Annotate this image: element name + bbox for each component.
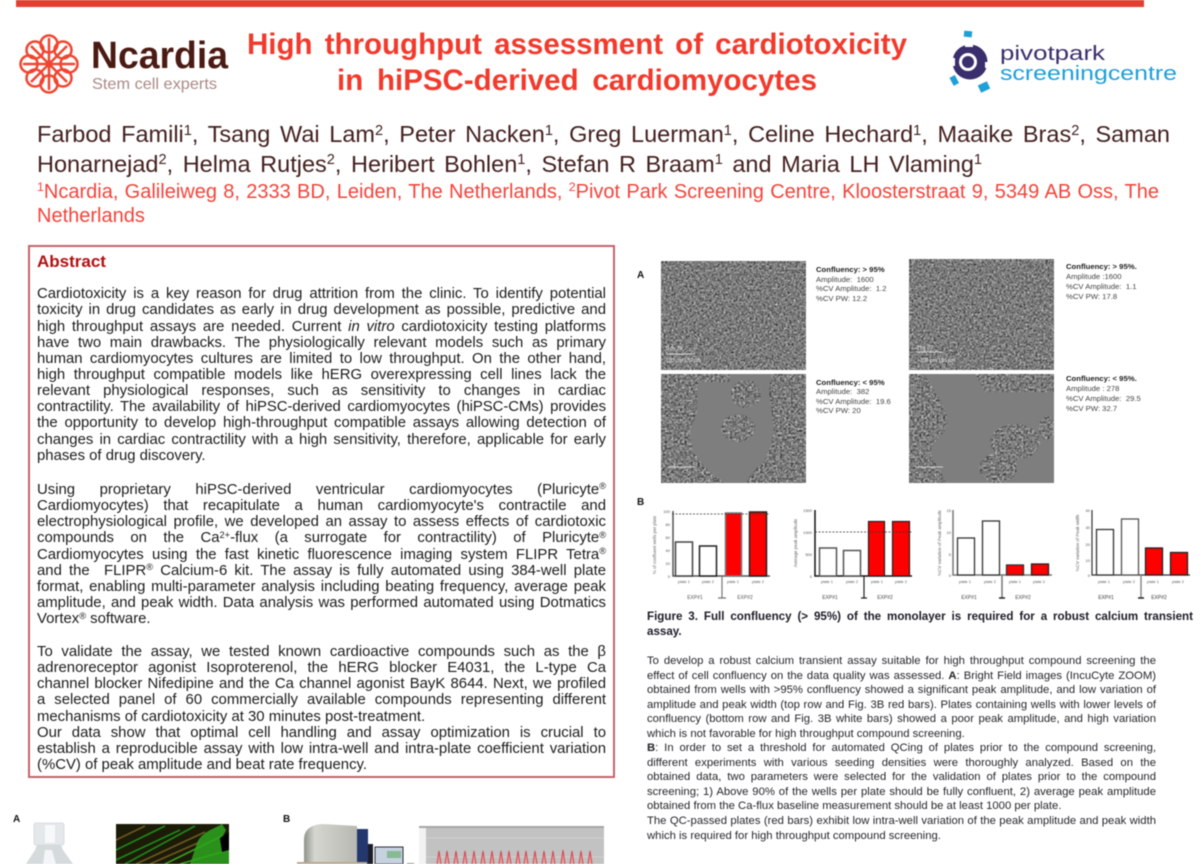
panel: abstract	[28, 245, 615, 778]
bar chart 1: confluent wells percentage: plate 1	[678, 579, 691, 584]
logo: Pivot Park Screening Centre	[949, 31, 1177, 93]
panel label B, figure 3: B	[637, 497, 644, 508]
bar chart 4: variation of peak width: plate 1	[1147, 579, 1160, 584]
figure 3 description text: obtained data, two parameters were selected for the validation of plates prior to the compound	[647, 771, 1156, 783]
stats: bottom left image: %CV Amplitude: 19.6	[816, 397, 891, 406]
abstract paragraph 3: Our data show that optimal cell handling and assay optimization is crucial to	[37, 725, 606, 741]
bar chart 2: average peak amplitude: plate 2	[895, 579, 908, 584]
bar chart 2: average peak amplitude: EXP#2	[877, 595, 893, 601]
stats: top left image: Amplitude: 1600	[816, 275, 874, 284]
panel label A, figure 3: A	[637, 270, 644, 281]
abstract paragraph 2: Vortex® software.	[37, 611, 151, 627]
bar chart 1: confluent wells percentage: 40	[666, 548, 671, 553]
abstract paragraph 3: establish a reproducible assay with low intra-well and intra-plate coefficient variation	[37, 741, 606, 757]
figure 3 description text: screening; 1) Above 90% of the wells per plate should be fully confluent, 2) average peak amplitude	[647, 786, 1156, 798]
microscopy image: top right, confluent	[909, 259, 1054, 370]
figure 3 caption	[646, 610, 1194, 638]
bar chart 3: variation of peak amplitude: plate 2	[984, 579, 997, 584]
bar chart 1: confluent wells percentage: plate 2	[702, 579, 715, 584]
stats: top left image: %CV PW: 12.2	[816, 294, 867, 303]
abstract paragraph 1: high throughput assays are needed. Current in vitro cardiotoxicity testing platforms	[37, 318, 606, 334]
stats: bottom left image	[816, 378, 891, 415]
abstract paragraph 3	[36, 644, 607, 773]
bar chart 1: confluent wells percentage: 60	[666, 535, 671, 540]
figure 3 description text: B: In order to set a threshold for automated QCing of plates prior to the compound screening,	[647, 742, 1156, 754]
stats: top right image	[1066, 262, 1137, 301]
top banner bar	[16, 0, 1144, 7]
bar chart 1: confluent wells percentage	[652, 509, 770, 601]
abstract paragraph 1: high throughput compatible models like hERG overexpressing cell lines lack the	[37, 367, 606, 383]
logo: Ncardia: Stem cell experts	[92, 76, 217, 93]
abstract paragraph 2	[36, 481, 607, 627]
microscopy image: top right, confluent: 100 µm 100 µm	[920, 358, 955, 364]
bar chart 1: confluent wells percentage: plate 2	[752, 579, 765, 584]
bar chart 4: variation of peak width: %CV variation of Peak width	[1075, 514, 1080, 571]
bar chart 3: variation of peak amplitude: 15	[947, 508, 952, 513]
authors	[37, 121, 1170, 178]
panel label A, bottom figure: A	[13, 814, 20, 825]
stats: bottom left image: Confluency: < 95%	[816, 378, 885, 387]
bar chart 2: average peak amplitude: plate 1	[871, 579, 884, 584]
abstract paragraph 1: toxicity in drug candidates as early in drug development as possible, predictive and	[37, 302, 606, 318]
title	[247, 28, 908, 97]
abstract paragraph 3: channel blocker Nifedipine and the Ca channel agonist BayK 8644. Next, we profiled	[37, 676, 606, 692]
bar chart 4: variation of peak width: EXP#2	[1151, 595, 1167, 601]
abstract paragraph 1	[36, 286, 607, 464]
abstract paragraph 1: have two main drawbacks. The physiologically relevant models such as primary	[37, 335, 606, 351]
bar chart 2: average peak amplitude: 0	[810, 574, 813, 579]
figure 3 description text: obtained from wells with >95% confluency showed a significant peak amplitude, and low variation of	[647, 684, 1156, 696]
abstract paragraph 2: Using proprietary hiPSC-derived ventricular cardiomyocytes (Pluricyte®	[37, 481, 606, 498]
abstract heading: Abstract	[37, 252, 106, 271]
bar chart 4: variation of peak width: 20	[1086, 542, 1091, 547]
bar chart 3: variation of peak amplitude: EXP#1	[961, 595, 977, 601]
bar chart 4: variation of peak width: 0	[1088, 573, 1091, 578]
abstract paragraph 2: electrophysiological profile, we developed an assay to assess effects of cardiotoxic	[37, 514, 606, 530]
stats: top right image: %CV Amplitude: 1.1	[1066, 282, 1137, 291]
abstract paragraph 2: and the FLIPR® Calcium-6 kit. The assay is fully automated using 384-well plate	[37, 562, 606, 579]
bar chart 1: confluent wells percentage: 20	[666, 561, 671, 566]
abstract paragraph 1: relevant physiological responses, such as sensitivity to changes in cardiac	[37, 383, 606, 399]
bar chart 2: average peak amplitude: 500	[805, 552, 813, 557]
panel label B, bottom figure: B	[283, 814, 290, 825]
bar chart 3: variation of peak amplitude: plate 1	[959, 579, 972, 584]
bar chart 4: variation of peak width: plate 2	[1123, 579, 1136, 584]
abstract paragraph 2: format, enabling multi-parameter analysis including beating frequency, average peak	[37, 579, 606, 595]
bar chart 2: average peak amplitude: 1000	[803, 530, 813, 535]
abstract paragraph 1: human cardiomyocytes cultures are limited to low throughput. On the other hand,	[37, 351, 606, 367]
stats: top right image: Amplitude :1600	[1066, 272, 1122, 281]
abstract paragraph 2: Cardiomyocytes) that recapitulate a human cardiomyocyte's contractile and	[37, 498, 606, 514]
title: in hiPSC-derived cardiomyocytes	[337, 64, 817, 96]
abstract paragraph 1: changes in cardiac contractility with a high sensitivity, therefore, applicable for early	[37, 432, 606, 448]
authors: Honarnejad2, Helma Rutjes2, Heribert Bohlen1, Stefan R Braam1 and Maria LH Vlaming1	[37, 150, 982, 176]
bar chart 4: variation of peak width: 30	[1086, 525, 1091, 530]
bar chart 3: variation of peak amplitude: plate 2	[1033, 579, 1046, 584]
logo: Ncardia	[20, 35, 229, 93]
bar chart 2: average peak amplitude: 1500	[803, 508, 813, 513]
fluorescence image of cardiomyocytes	[116, 824, 229, 864]
microscopy image: bottom left, low confluency	[661, 374, 806, 483]
title: High throughput assessment of cardiotoxicity	[247, 28, 907, 60]
abstract paragraph 1: contractility. The availability of hiPSC-derived cardiomyocytes (hiPSC-CMs) provides	[37, 399, 606, 415]
bar chart 4: variation of peak width: 40	[1086, 508, 1091, 513]
bar chart 2: average peak amplitude	[793, 508, 912, 601]
abstract paragraph 2: compounds on the Ca2+-flux (a surrogate for contractility) of Pluricyte®	[37, 530, 606, 546]
bar chart 2: average peak amplitude: EXP#1	[822, 595, 838, 601]
bar chart 1: confluent wells percentage: EXP#1	[687, 595, 703, 601]
bar chart 3: variation of peak amplitude: 10	[947, 530, 952, 535]
figure 3 caption: Figure 3. Full confluency (> 95%) of the monolayer is required for a robust calcium transient	[647, 610, 1193, 623]
abstract paragraph 3: a selected panel of 60 commercially available compounds representing different	[37, 692, 606, 708]
figure 3 caption: assay.	[647, 625, 682, 638]
calcium transient trace chart	[419, 826, 604, 864]
microscopy image: top left, confluent	[661, 261, 806, 370]
bar chart 2: average peak amplitude: plate 2	[846, 579, 859, 584]
bar chart 3: variation of peak amplitude: EXP#2	[1015, 595, 1031, 601]
stats: bottom right image	[1066, 374, 1141, 413]
bar chart 1: confluent wells percentage: EXP#2	[737, 595, 753, 601]
bar chart 1: confluent wells percentage: % of confluent wells per plate	[652, 515, 657, 574]
logo: Ncardia: Ncardia	[91, 35, 229, 77]
bar chart 4: variation of peak width: 10	[1086, 558, 1091, 563]
stats: top right image: %CV PW: 17.8	[1066, 292, 1117, 301]
figure 3 description text: different experiments with various seeding densities were thoroughly analyzed. Based on the	[647, 757, 1156, 769]
figure 3 description text: effect of cell confluency on the data quality was assessed. A: Bright Field images (IncuCyte ZOOM)	[647, 670, 1156, 682]
logo: Pivot Park Screening Centre: screeningcentre	[1000, 63, 1177, 85]
abstract paragraph 3: To validate the assay, we tested known cardioactive compounds such as the β	[37, 644, 606, 660]
bar chart 3: variation of peak amplitude: 5	[949, 552, 952, 557]
bar chart 4: variation of peak width: EXP#1	[1098, 595, 1114, 601]
logo: Pivot Park Screening Centre: pivotpark	[1000, 43, 1106, 65]
abstract paragraph 3: (%CV) of peak amplitude and beat rate frequency.	[37, 757, 367, 773]
affiliations: Netherlands	[37, 204, 145, 226]
stats: top left image	[816, 265, 887, 303]
microscopy image: top left, confluent: 100 µm 100 µm	[666, 358, 701, 364]
stats: bottom right image: Amplitude : 278	[1066, 384, 1119, 393]
bar chart 1: confluent wells percentage: plate 1	[727, 579, 740, 584]
stats: top right image: Confluency: > 95%.	[1066, 262, 1137, 271]
figure 3 description text: To develop a robust calcium transient assay suitable for high throughput compound screening the	[647, 655, 1156, 667]
microscopy image: top left, confluent: 0 px 20	[666, 346, 683, 352]
figure 3 description text: The QC-passed plates (red bars) exhibit low intra-well variation of the peak amplitude and peak width	[647, 815, 1156, 827]
bar chart 1: confluent wells percentage: 0	[668, 574, 671, 579]
affiliations: 1Ncardia, Galileiweg 8, 2333 BD, Leiden, The Netherlands, 2Pivot Park Screening Centre, Kloosterstraat 9, 5349 AB Oss, The	[37, 180, 1159, 202]
abstract paragraph 1: the opportunity to develop high-throughput compatible assays allowing detection of	[37, 415, 606, 431]
figure 3 description text: obtained from the Ca-flux baseline measurement should be at least 1000 per plate.	[647, 800, 1061, 812]
figure 3 description text: which is not favorable for high throughput compound screening.	[647, 728, 965, 740]
abstract paragraph 1: Cardiotoxicity is a key reason for drug attrition from the clinic. To identify potential	[37, 286, 606, 302]
authors: Farbod Famili1, Tsang Wai Lam2, Peter Nacken1, Greg Luerman1, Celine Hechard1, Maaike Bras2, Saman	[37, 121, 1170, 147]
stats: bottom right image: Confluency: < 95%.	[1066, 374, 1137, 383]
bar chart 2: average peak amplitude: plate 1	[821, 579, 834, 584]
bar chart 1: confluent wells percentage: 100	[663, 509, 671, 514]
figure 3 description text	[646, 655, 1157, 842]
bar chart 3: variation of peak amplitude	[937, 508, 1052, 601]
stats: top left image: Confluency: > 95%	[816, 265, 885, 274]
abstract paragraph 1: phases of drug discovery.	[37, 448, 206, 464]
bar chart 3: variation of peak amplitude: 0	[949, 573, 952, 578]
microscopy image: top right, confluent: 0 px 20	[916, 345, 933, 351]
bar chart 3: variation of peak amplitude: %CV variation of Peak amplitude	[937, 510, 942, 576]
abstract paragraph 3: mechanisms of cardiotoxicity at 30 minutes post-treatment.	[37, 709, 425, 725]
figure 3 description text: amplitude and peak width (top row and Fig. 3B red bars). Plates containing wells with lower levels of	[647, 699, 1156, 711]
abstract paragraph 2: amplitude, and peak width. Data analysis was performed automated using Dotmatics	[37, 595, 606, 611]
bar chart 2: average peak amplitude: Average peak amplitude	[793, 518, 798, 567]
abstract paragraph 3: adrenoreceptor agonist Isoproterenol, the hERG blocker E4031, the L-type Ca	[37, 660, 606, 676]
microscopy image: bottom right, low confluency	[909, 374, 1054, 483]
icon: culture flask	[26, 823, 73, 864]
figure 3 description text: which is required for high throughput compound screening.	[647, 830, 941, 842]
stats: bottom right image: %CV PW: 32.7	[1066, 404, 1117, 413]
bar chart 3: variation of peak amplitude: plate 1	[1009, 579, 1022, 584]
bar chart 1: confluent wells percentage: 80	[666, 522, 671, 527]
stats: bottom left image: Amplitude: 382	[816, 387, 869, 396]
abstract paragraph 2: Cardiomyocytes using the fast kinetic fluorescence imaging system FLIPR Tetra®	[37, 546, 606, 563]
stats: bottom left image: %CV PW: 20	[816, 406, 861, 415]
affiliations	[37, 180, 1159, 226]
bar chart 4: variation of peak width: plate 2	[1172, 579, 1185, 584]
bar chart 4: variation of peak width	[1075, 508, 1190, 601]
stats: bottom right image: %CV Amplitude: 29.5	[1066, 394, 1141, 403]
stats: top left image: %CV Amplitude: 1.2	[816, 284, 887, 293]
bar chart 4: variation of peak width: plate 1	[1098, 579, 1111, 584]
figure 3 description text: confluency (bottom row and Fig. 3B white bars) showed a poor peak amplitude, and high variation	[647, 713, 1156, 725]
icon: FLIPR instrument	[297, 824, 414, 864]
